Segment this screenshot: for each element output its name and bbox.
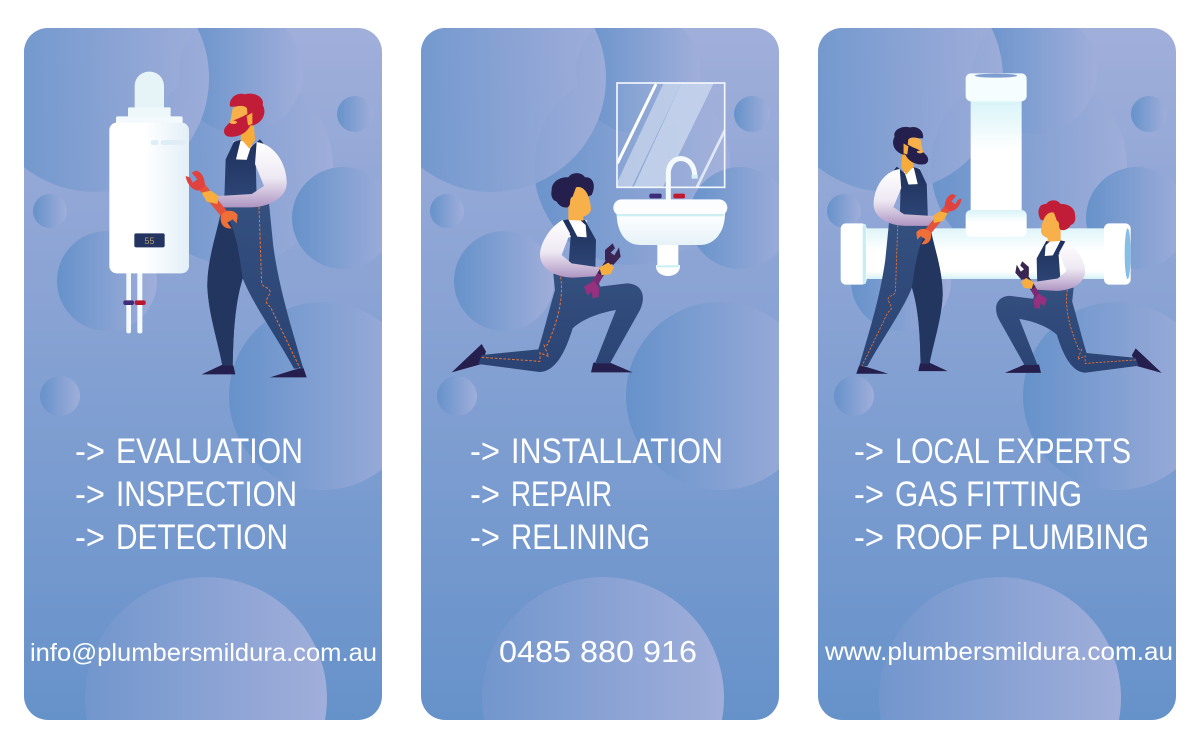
service list: -> — [854, 432, 884, 471]
service list: DETECTION — [116, 518, 288, 557]
panel background — [775, 0, 1200, 720]
service list: INSTALLATION — [511, 432, 723, 471]
service list: RELINING — [511, 518, 650, 557]
panel: installation — [421, 28, 779, 720]
figure: plumber with wrench — [186, 94, 307, 377]
service list — [75, 432, 303, 557]
panel: local experts — [775, 0, 1200, 720]
service list: -> — [470, 475, 500, 514]
service list: -> — [470, 518, 500, 557]
figure: kneeling plumber — [452, 173, 643, 372]
service list: EVALUATION — [116, 432, 303, 471]
service list: -> — [75, 432, 105, 471]
icon: sink and mirror — [613, 83, 727, 276]
service list: REPAIR — [511, 475, 612, 514]
icon: t-shaped pipe — [841, 73, 1131, 285]
service list: INSPECTION — [116, 475, 297, 514]
service list: -> — [75, 475, 105, 514]
service list: -> — [75, 518, 105, 557]
figure: standing plumber — [856, 127, 962, 374]
contact website: www.plumbersmildura.com.au — [824, 638, 1173, 666]
service list — [470, 432, 723, 557]
service list: -> — [470, 432, 500, 471]
contact email: info@plumbersmildura.com.au — [30, 639, 377, 667]
service list: ROOF PLUMBING — [895, 518, 1149, 557]
service list: LOCAL EXPERTS — [895, 432, 1131, 471]
panel: evaluation — [0, 0, 417, 720]
service list: GAS FITTING — [895, 475, 1082, 514]
icon: water heater: 55 — [144, 236, 154, 246]
service list: -> — [854, 518, 884, 557]
contact phone: 0485 880 916 — [499, 634, 697, 669]
panel background — [0, 0, 417, 720]
panel background — [378, 0, 814, 720]
icon: water heater — [109, 72, 189, 333]
service list — [854, 432, 1149, 557]
service list: -> — [854, 475, 884, 514]
figure: kneeling plumber — [996, 200, 1162, 373]
